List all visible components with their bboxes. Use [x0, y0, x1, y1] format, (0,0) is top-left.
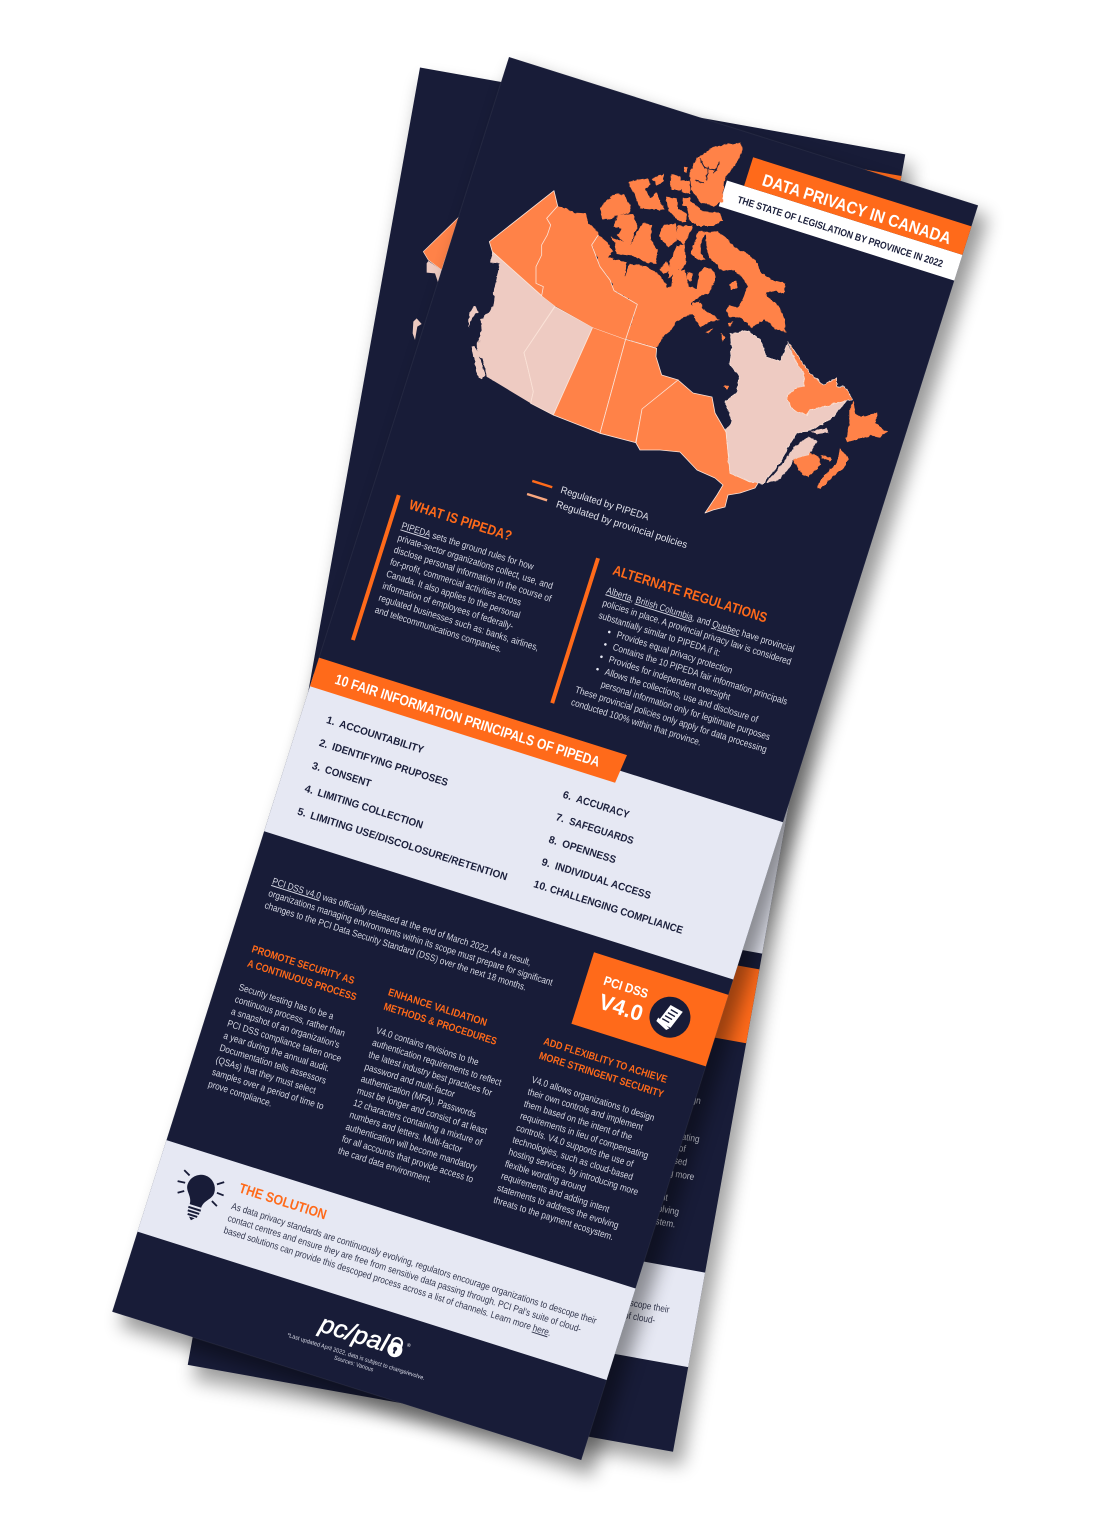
back brochure sheet: them based on the intent of the: [569, 1098, 682, 1128]
column: promote security: Documentation tells assessors: [218, 1042, 328, 1086]
front brochure sheet: [112, 57, 978, 1460]
panel: alternate regulations: ALTERNATE REGULATIONS: [611, 562, 769, 625]
column: add flexibility: hosting services, by introducing more: [507, 1146, 640, 1197]
back brochure sheet: threats to the payment ecosystem.: [551, 1197, 676, 1230]
panel: 10 fair information principals: LIMITING COLLECTION: [316, 787, 424, 831]
panel: alternate regulations: Alberta, British Columbia, and Quebec have provincial: [605, 585, 796, 654]
title banner: [719, 152, 971, 281]
panel: what is PIPEDA: disclose personal information in the course of: [393, 544, 553, 604]
panel: 10 fair information principals: SAFEGUARDS: [568, 816, 635, 847]
column: enhance validation: METHODS & PROCEDURES: [382, 1001, 498, 1048]
column: enhance validation: [337, 986, 521, 1197]
logo: ®: [406, 1341, 412, 1349]
back sheet shadow: [193, 80, 913, 1466]
panel: what is PIPEDA: private-sector organizations collect, use, and: [396, 532, 554, 591]
column: promote security: (QSAs) that they must select: [215, 1054, 318, 1096]
back brochure sheet: contact centres and ensure they are free from sensitive data passing through. PCI Pal's suite of cloud-: [290, 1250, 656, 1326]
panel: the solution: [138, 1140, 636, 1380]
PCI DSS V4.0 badge: V4.0: [596, 989, 646, 1026]
logo: [315, 1309, 413, 1364]
column: enhance validation: password and multi-factor: [363, 1061, 456, 1100]
panel: 10 fair information principals: 1.: [325, 714, 337, 728]
PCI DSS intro text: PCI DSS v4.0 was officially released at the end of March 2022. As a result,: [271, 876, 533, 968]
panel: 10 fair information principals: 10 FAIR INFORMATION PRINCIPALS OF PIPEDA: [333, 672, 602, 771]
icon: padlock: [385, 1336, 406, 1359]
column: enhance validation: the card data environment.: [337, 1145, 433, 1185]
panel: 10 fair information principals: 3.: [310, 760, 322, 774]
back brochure sheet: technologies, such as cloud-based: [562, 1135, 688, 1168]
panel: alternate regulations: conducted 100% within that province.: [570, 697, 703, 748]
footnote: Sources: Various: [333, 1355, 374, 1374]
panel: what is PIPEDA: [351, 492, 571, 694]
back brochure sheet: controls. V4.0 supports the use of: [565, 1122, 687, 1154]
panel: what is PIPEDA: and telecommunications companies.: [374, 604, 503, 654]
column: promote security: a snapshot of an organization's: [230, 1006, 342, 1050]
back brochure sheet: As data privacy standards are continuously evolving, regulators encourage organizations to descope their: [292, 1237, 670, 1315]
column: add flexibility: threats to the payment ecosystem.: [492, 1194, 615, 1242]
panel: 10 fair information principals: IDENTIFYING PRUPOSES: [330, 741, 449, 789]
column: enhance validation: the latest industry best practices for: [367, 1049, 493, 1098]
column: add flexibility: statements to address the evolving: [496, 1182, 620, 1231]
panel: alternate regulations: These provincial policies only apply for data processing: [574, 684, 768, 755]
column: add flexibility: them based on the intent of the: [523, 1098, 634, 1142]
column: promote security: PCI DSS compliance taken once: [226, 1018, 343, 1064]
panel: what is PIPEDA: PIPEDA sets the ground rules for how: [400, 520, 536, 572]
column: promote security: a year during the annual audit.: [222, 1030, 331, 1074]
panel: 10 fair information principals: 4.: [303, 783, 315, 797]
panel: what is PIPEDA: WHAT IS PIPEDA?: [407, 496, 514, 544]
back sheet map fragment: [413, 217, 459, 340]
column: promote security: Security testing has to be a: [237, 982, 335, 1022]
panel: 10 fair information principals: LIMITING USE/DISCOLOSURE/RETENTION: [309, 810, 509, 883]
panel: 10 fair information principals: CONSENT: [323, 764, 373, 790]
PCI DSS intro text: changes to the PCI Data Security Standard (DSS) over the next 18 months.: [263, 900, 528, 993]
column: add flexibility: ADD FLEXIBLITY TO ACHIEVE: [542, 1036, 669, 1086]
column: add flexibility: MORE STRINGENT SECURITY: [537, 1050, 665, 1101]
panel: the solution: contact centres and ensure they are free from sensitive data passing through. PCI Pal's suite of cloud-: [226, 1213, 583, 1334]
column: enhance validation: numbers and letters. Multi-factor: [348, 1109, 464, 1155]
panel: the solution: THE SOLUTION: [237, 1180, 329, 1222]
title banner: THE STATE OF LEGISLATION BY PROVINCE IN 2022: [736, 195, 945, 270]
panel: 10 fair information principals: CHALLENGING COMPLIANCE: [548, 883, 684, 937]
panel: 10 fair information principals: 7.: [554, 811, 566, 825]
column: add flexibility: V4.0 allows organizations to design: [530, 1074, 656, 1123]
legend: Regulated by provincial policies: [555, 499, 689, 551]
column: enhance validation: V4.0 contains revisions to the: [375, 1025, 480, 1068]
panel: the solution: based solutions can provide this descoped process across a list of channels. Learn more here.: [223, 1225, 553, 1338]
back brochure sheet: hosting services, by introducing more: [560, 1148, 695, 1182]
back brochure sheet: requirements in lieu of compensating: [567, 1110, 700, 1145]
column: add flexibility: their own controls and implement: [526, 1086, 645, 1133]
panel: 10 fair information principals: OPENNESS: [560, 838, 617, 866]
logo: pc/pal: [315, 1309, 393, 1358]
column: enhance validation: authentication (MFA). Passwords: [360, 1073, 478, 1120]
column: enhance validation: ENHANCE VALIDATION: [387, 986, 488, 1029]
panel: 10 fair information principals: ACCOUNTABILITY: [338, 718, 425, 756]
back brochure sheet: statements to address the evolving: [553, 1184, 680, 1217]
back brochure sheet: flexible wording around: [558, 1160, 643, 1185]
panel: what is PIPEDA: Canada. It also applies to the personal: [385, 568, 522, 621]
panel: 10 fair information principals: ACCURACY: [575, 793, 631, 821]
panel: 10 fair information principals: [264, 658, 788, 980]
panel: what is PIPEDA: for-profit, commercial activities across: [389, 556, 523, 608]
panel: 10 fair information principals: INDIVIDUAL ACCESS: [553, 860, 652, 902]
column: enhance validation: authentication will become mandatory: [344, 1121, 479, 1173]
Quebec and Labrador: [725, 331, 853, 483]
column: add flexibility: flexible wording around: [504, 1158, 587, 1194]
panel: alternate regulations: substantially similar to PIPEDA if it:: [597, 610, 722, 658]
back brochure sheet: their own controls and implement: [571, 1086, 692, 1118]
panel: alternate regulations: Provides equal privacy protection: [615, 629, 734, 676]
map of Canada: [468, 143, 887, 513]
column: promote security: prove compliance.: [207, 1078, 274, 1109]
panel: alternate regulations: [550, 556, 812, 771]
legend: Regulated by PIPEDA: [559, 485, 650, 523]
footnote: *Last updated April 2022, data is subject to change/evolve.: [286, 1333, 426, 1382]
panel: 10 fair information principals: 8.: [547, 834, 559, 848]
column: enhance validation: must be longer and consist of at least: [356, 1085, 489, 1136]
western provinces and territories: [480, 191, 678, 443]
panel: alternate regulations: Provides for independent oversight: [608, 654, 732, 702]
panel: 10 fair information principals: 9.: [540, 856, 552, 870]
legend: [525, 476, 693, 551]
icon: light bulb: [168, 1168, 228, 1227]
PCI DSS intro text: organizations managing environments within its scope must prepare for significant: [267, 888, 555, 988]
column: add flexibility: technologies, such as cloud-based: [511, 1134, 634, 1182]
arctic islands and northern coast: [468, 143, 887, 489]
PCI DSS V4.0 badge: [571, 952, 728, 1066]
column: add flexibility: requirements in lieu of compensating: [519, 1110, 650, 1161]
back brochure sheet: requirements and adding intent: [556, 1172, 669, 1203]
column: enhance validation: for all accounts that provide access to: [341, 1133, 475, 1185]
panel: what is PIPEDA: information of employees of federally-: [381, 580, 515, 632]
panel: 10 fair information principals: 10.: [532, 878, 550, 894]
panel: alternate regulations: policies in place. A provincial privacy law is considered: [601, 597, 793, 667]
column: enhance validation: 12 characters containing a mixture of: [352, 1097, 484, 1148]
back brochure sheet: [188, 68, 905, 1452]
column: add flexibility: [492, 1036, 675, 1245]
icon: document: [655, 1003, 683, 1033]
column: promote security: samples over a period of time to: [211, 1066, 325, 1112]
front sheet shadow: [120, 67, 988, 1476]
panel: alternate regulations: Contains the 10 PIPEDA fair information principals: [611, 641, 789, 707]
Ontario: [636, 380, 760, 513]
title banner: DATA PRIVACY IN CANADA: [760, 171, 953, 248]
panel: 10 fair information principals: 5.: [296, 806, 308, 820]
panel: alternate regulations: Allows the collections, use and disclosure of: [604, 666, 760, 725]
panel: 10 fair information principals: 6.: [561, 789, 573, 803]
column: promote security: continuous process, rather than: [234, 994, 346, 1039]
column: add flexibility: controls. V4.0 supports the use of: [515, 1122, 635, 1169]
PCI DSS V4.0 badge: PCI DSS: [602, 973, 650, 1001]
panel: the solution: As data privacy standards are continuously evolving, regulators encourage organizations to descope their: [230, 1201, 598, 1326]
panel: alternate regulations: personal information only for legitimate purposes: [600, 679, 772, 742]
column: enhance validation: authentication requirements to reflect: [371, 1037, 503, 1088]
panel: 10 fair information principals: 2.: [318, 737, 330, 751]
column: promote security: A CONTINUOUS PROCESS: [246, 958, 358, 1003]
column: add flexibility: requirements and adding intent: [500, 1170, 611, 1215]
column: promote security: [207, 943, 366, 1125]
column: promote security: PROMOTE SECURITY AS: [250, 943, 356, 987]
panel: what is PIPEDA: regulated businesses such as: banks, airlines,: [377, 592, 540, 653]
back brochure sheet: V4.0 allows organizations to design: [573, 1073, 702, 1106]
